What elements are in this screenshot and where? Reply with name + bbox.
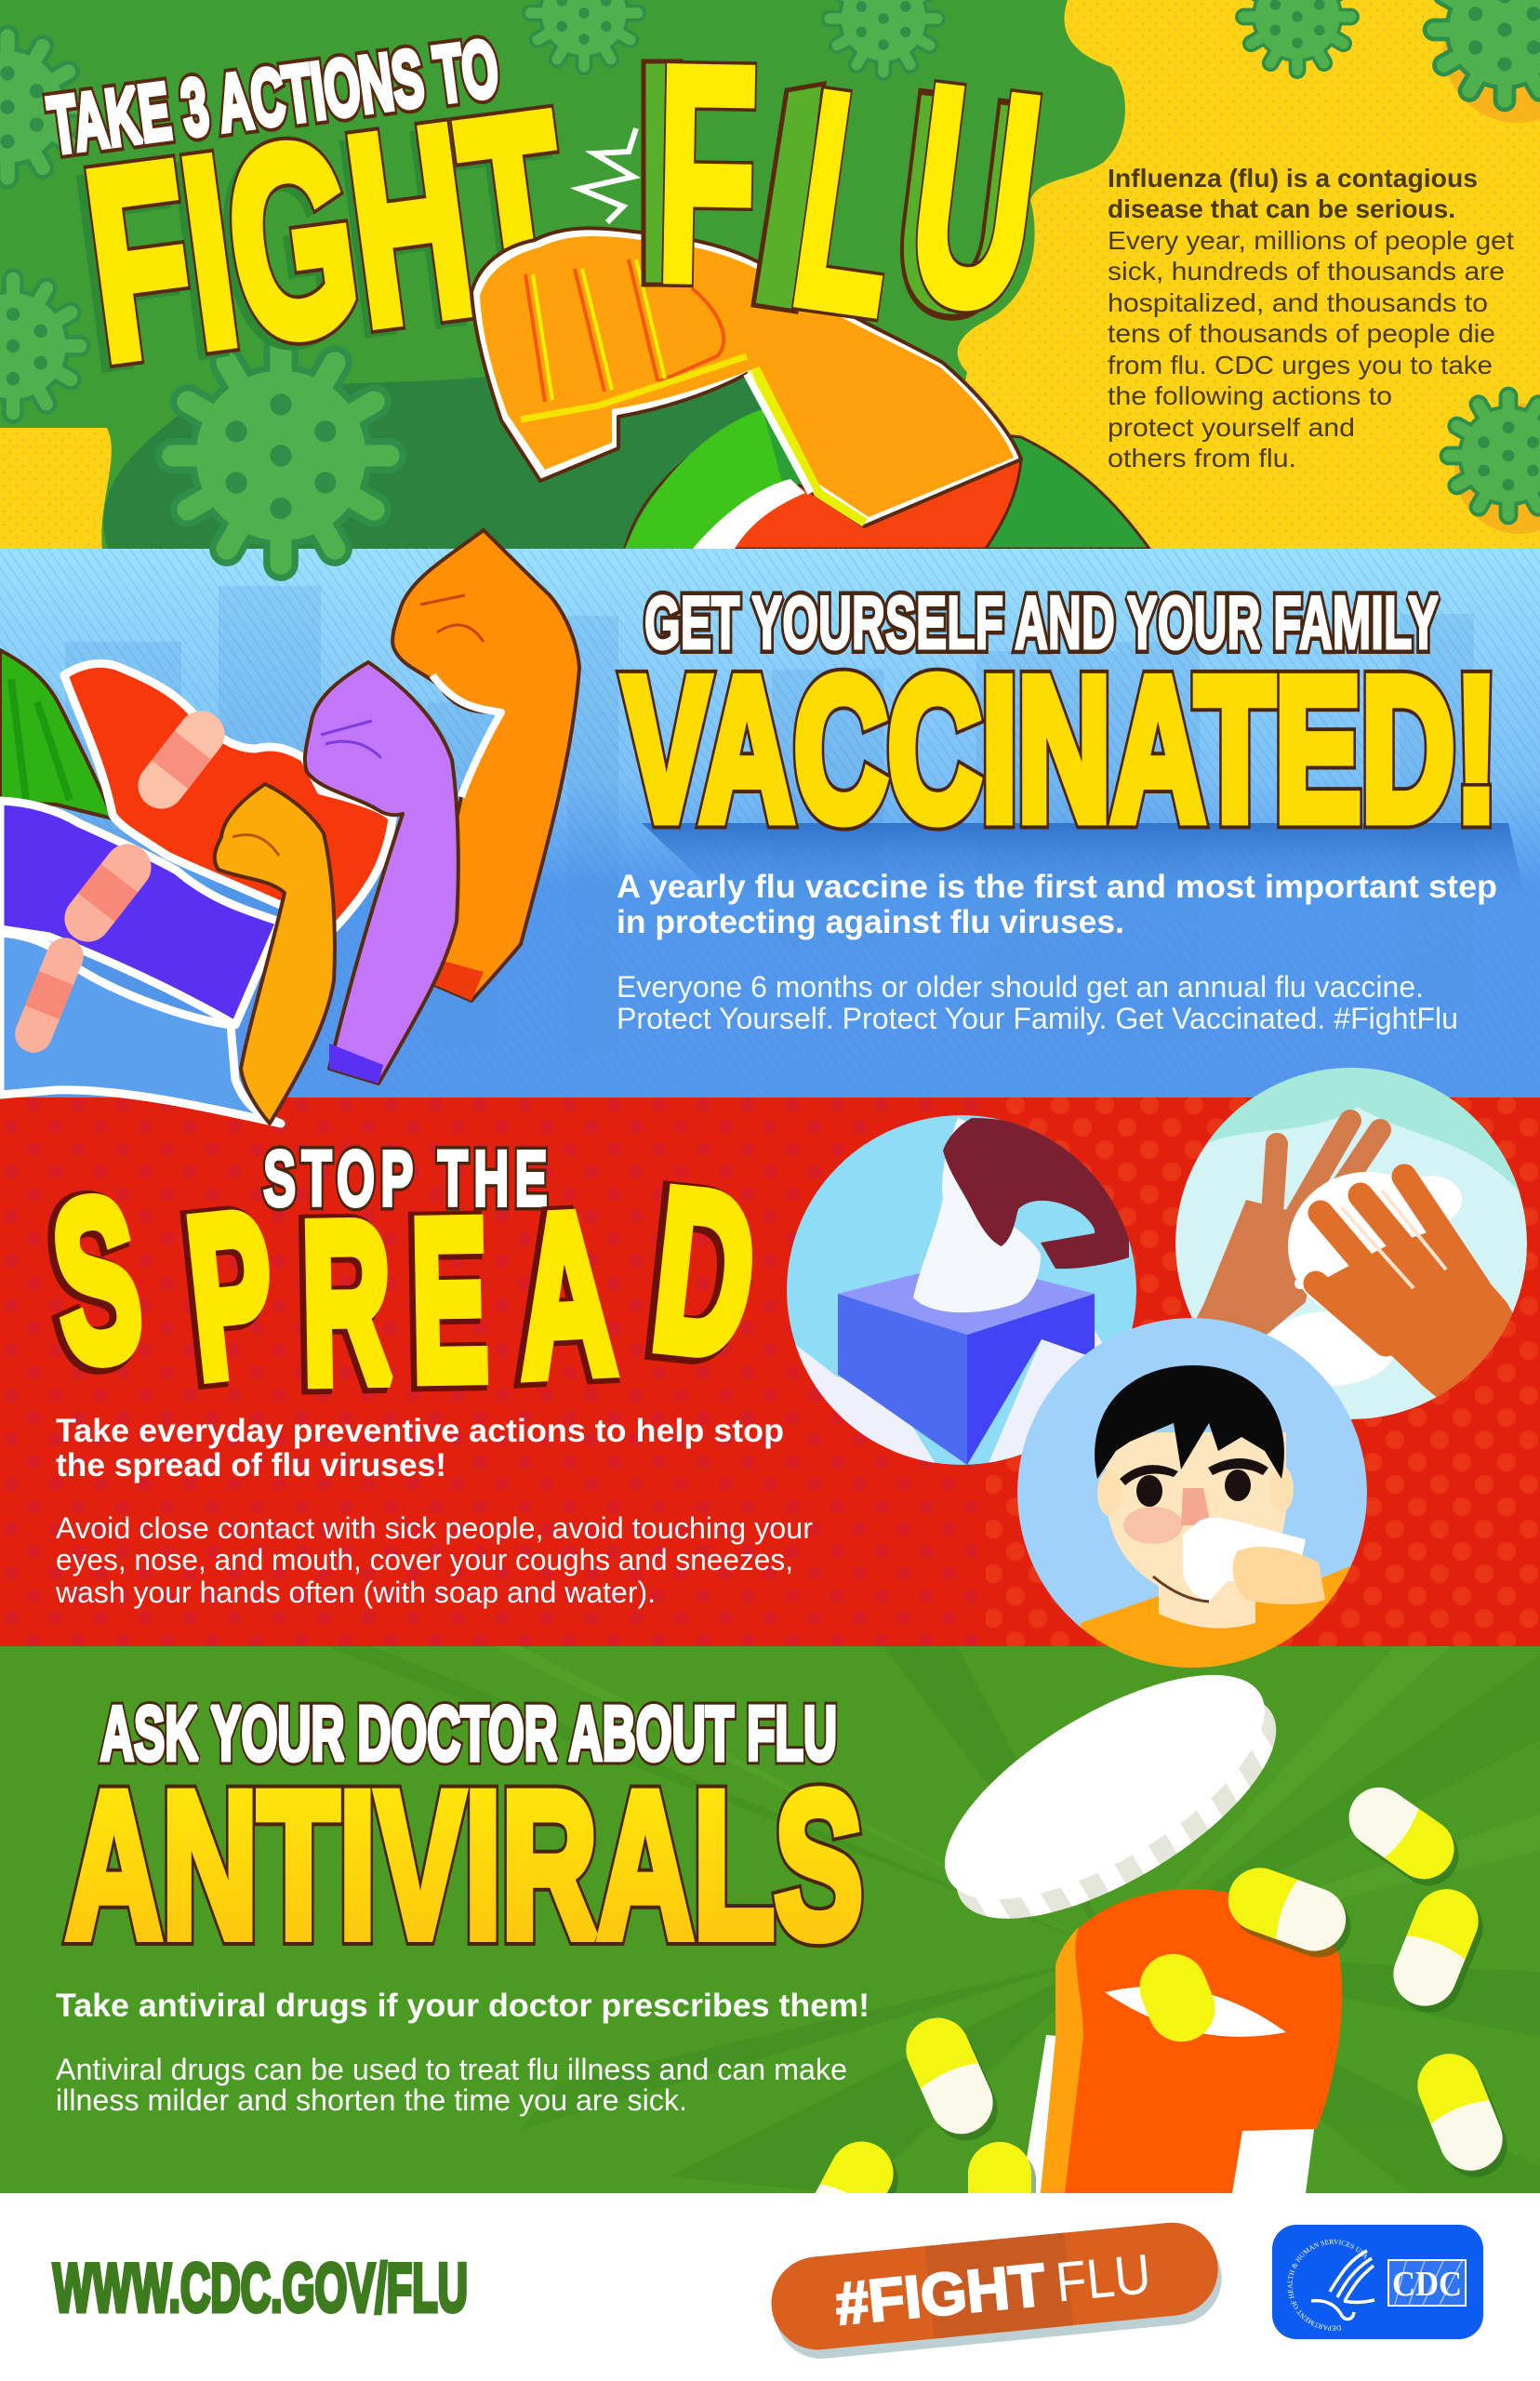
text block: vaccine lead <box>617 869 1497 940</box>
purple arm <box>305 662 458 1084</box>
heading: stop the: STOP THE <box>263 1135 553 1222</box>
crumpled tissues <box>795 1330 1103 1463</box>
text block: spread detail: eyes, nose, and mouth, cover your coughs and sneezes, <box>56 1543 793 1576</box>
tissue <box>1183 1518 1306 1602</box>
text block: vaccine lead: in protecting against flu viruses. <box>617 904 1124 940</box>
heading: spread staggered letters: P <box>178 1164 285 1426</box>
heading: fight: FIGHT <box>73 58 582 416</box>
text block: antiviral detail <box>56 2053 847 2117</box>
text block: influenza intro: tens of thousands of people die <box>1108 319 1495 348</box>
letter F: F <box>654 1 760 346</box>
tissue box <box>838 1261 1095 1465</box>
badge: fight flu bandage: #FIGHT <box>832 2251 1048 2337</box>
flushed cheeks <box>1123 1507 1183 1544</box>
pulled tissue <box>913 1118 1041 1312</box>
letter U <box>877 20 1055 383</box>
letter U: U <box>877 27 1044 383</box>
badge: fight flu bandage: FLU <box>1053 2242 1153 2314</box>
heading: spread staggered letters: E <box>405 1173 486 1429</box>
heading: spread staggered letters: E <box>409 1172 490 1428</box>
heading: spread staggered letters: P <box>174 1164 282 1427</box>
virus field on top section <box>0 0 1540 564</box>
heading: spread staggered letters: R <box>296 1175 390 1431</box>
heading: spread staggered letters: A <box>511 1164 620 1424</box>
dark hand <box>943 1118 1129 1269</box>
heading: spread staggered letters <box>36 1140 766 1431</box>
bandage <box>55 834 161 951</box>
text block: influenza intro: disease that can be serious. <box>1108 194 1455 223</box>
text block: vaccine detail: Protect Yourself. Protect Your Family. Get Vaccinated. #FightFlu <box>617 1002 1458 1035</box>
heading: spread staggered letters: R <box>299 1174 393 1430</box>
text block: influenza intro: hospitalized, and thousands to <box>1108 288 1488 317</box>
letter U: U <box>894 20 1055 375</box>
heading: take 3 actions to <box>44 23 503 171</box>
link: cdc website: WWW.CDC.GOV/FLU <box>53 2251 468 2326</box>
capsules <box>815 1788 1507 2193</box>
letter F: F <box>654 1 760 346</box>
heading: flu 3D letters <box>644 1 1055 383</box>
heading: fight <box>73 58 582 416</box>
text block: influenza intro: sick, hundreds of thousands are <box>1108 257 1505 286</box>
cdc box <box>1388 2260 1466 2306</box>
heading: fight: FIGHT <box>73 58 582 416</box>
cdc wordmark: CDC <box>1392 2265 1462 2304</box>
text block: influenza intro <box>1108 164 1514 472</box>
bottle <box>1021 1889 1342 2193</box>
illustration: boy with tissue circle <box>1017 1318 1367 1669</box>
text block: antiviral lead: Take antiviral drugs if your doctor prescribes them! <box>56 1988 870 2024</box>
heading: ask your doctor about flu: ASK YOUR DOCTOR ABOUT FLU <box>100 1690 837 1776</box>
panel: footer <box>0 2193 1540 2359</box>
text block: influenza intro: Influenza (flu) is a contagious <box>1108 164 1478 193</box>
heading: spread staggered letters: D <box>639 1142 762 1406</box>
panel: top section background <box>0 0 1540 549</box>
heading: ask your doctor about flu <box>100 1690 837 1776</box>
heading: antivirals: ANTIVIRALS <box>66 1749 863 1981</box>
letter L: L <box>777 26 919 379</box>
heading: antivirals: ANTIVIRALS <box>66 1749 863 1981</box>
text block: spread detail: wash your hands often (with soap and water). <box>55 1576 656 1609</box>
violet arm <box>0 801 280 1025</box>
text block: spread lead <box>56 1413 784 1483</box>
panel: blue vaccinated section background <box>0 549 1540 1097</box>
heading: spread staggered letters: S <box>36 1151 149 1414</box>
hair <box>1095 1365 1284 1479</box>
panel: red spread section background <box>0 1097 1540 1646</box>
text block: spread detail: Avoid close contact with sick people, avoid touching your <box>56 1511 813 1545</box>
red arm <box>64 663 392 929</box>
nose <box>1181 1488 1211 1525</box>
heading: spread staggered letters: D <box>644 1140 766 1404</box>
light blue arm <box>0 933 281 1124</box>
heading: ask your doctor about flu: ASK YOUR DOCTOR ABOUT FLU <box>100 1690 837 1776</box>
badge: fight flu bandage <box>767 2218 1226 2363</box>
impact burst <box>579 128 636 222</box>
text block: influenza intro: others from flu. <box>1108 444 1296 472</box>
cape and sleeve behind fist <box>625 409 1149 549</box>
neck <box>1159 1586 1255 1629</box>
letter L <box>753 26 919 379</box>
shirt <box>1081 1566 1367 1669</box>
tall orange arm <box>392 530 579 1001</box>
text block: antiviral detail: Antiviral drugs can be used to treat flu illness and can make <box>56 2053 847 2086</box>
city skyline <box>65 586 1474 1053</box>
text block: antiviral detail: illness milder and shorten the time you are sick. <box>56 2083 687 2117</box>
heading: stop the: STOP THE <box>263 1135 553 1222</box>
letter U: U <box>894 20 1055 375</box>
bandage <box>9 932 89 1058</box>
illustration: tissue box circle <box>787 1115 1136 1479</box>
bottle cap <box>945 1674 1276 1919</box>
panel: green antivirals section background <box>0 1646 1540 2195</box>
face <box>1105 1432 1286 1602</box>
heading: spread staggered letters: S <box>41 1149 153 1412</box>
title: take 3 actions to fight <box>44 23 582 423</box>
heading: spread staggered letters: A <box>508 1165 617 1425</box>
text block: influenza intro: from flu. CDC urges you to take <box>1108 351 1493 379</box>
text block: vaccine detail: Everyone 6 months or older should get an annual flu vaccine. <box>617 970 1424 1004</box>
capsule inside bottle <box>1140 1953 1215 2042</box>
text block: influenza intro: Every year, millions of people get <box>1108 226 1514 255</box>
heading: antivirals <box>66 1749 863 1981</box>
text block: vaccine lead: A yearly flu vaccine is the first and most important step <box>617 869 1497 905</box>
hand <box>1233 1547 1325 1604</box>
icon: punching fist and arm <box>471 228 1021 526</box>
text block: influenza intro: the following actions to <box>1108 381 1392 410</box>
eagle mark <box>1311 2251 1374 2319</box>
heading: stop the <box>263 1135 553 1222</box>
jaw line <box>1153 1576 1209 1602</box>
illustration: raised arms with bandages <box>0 530 579 1124</box>
heading shadow: FIGHT <box>63 64 577 423</box>
text block: influenza intro: protect yourself and <box>1108 413 1355 442</box>
text block: vaccine detail <box>617 970 1458 1035</box>
text block: spread lead: the spread of flu viruses! <box>56 1447 446 1483</box>
illustration: pill bottle, cap and capsules <box>815 1674 1507 2193</box>
text block: spread detail <box>55 1511 813 1609</box>
illustration: hand washing circle <box>1175 1060 1540 1432</box>
logo: cdc and hhs <box>1272 2225 1483 2339</box>
eyes and brows <box>1120 1458 1268 1507</box>
small orange arm <box>215 784 335 1124</box>
text block: spread lead: Take everyday preventive actions to help stop <box>56 1413 784 1449</box>
letter F <box>644 1 760 346</box>
seal text: DEPARTMENT OF HEALTH & HUMAN SERVICES USA <box>1287 2240 1367 2331</box>
green arm <box>0 650 113 818</box>
bandage <box>128 701 234 818</box>
letter L: L <box>777 26 919 379</box>
